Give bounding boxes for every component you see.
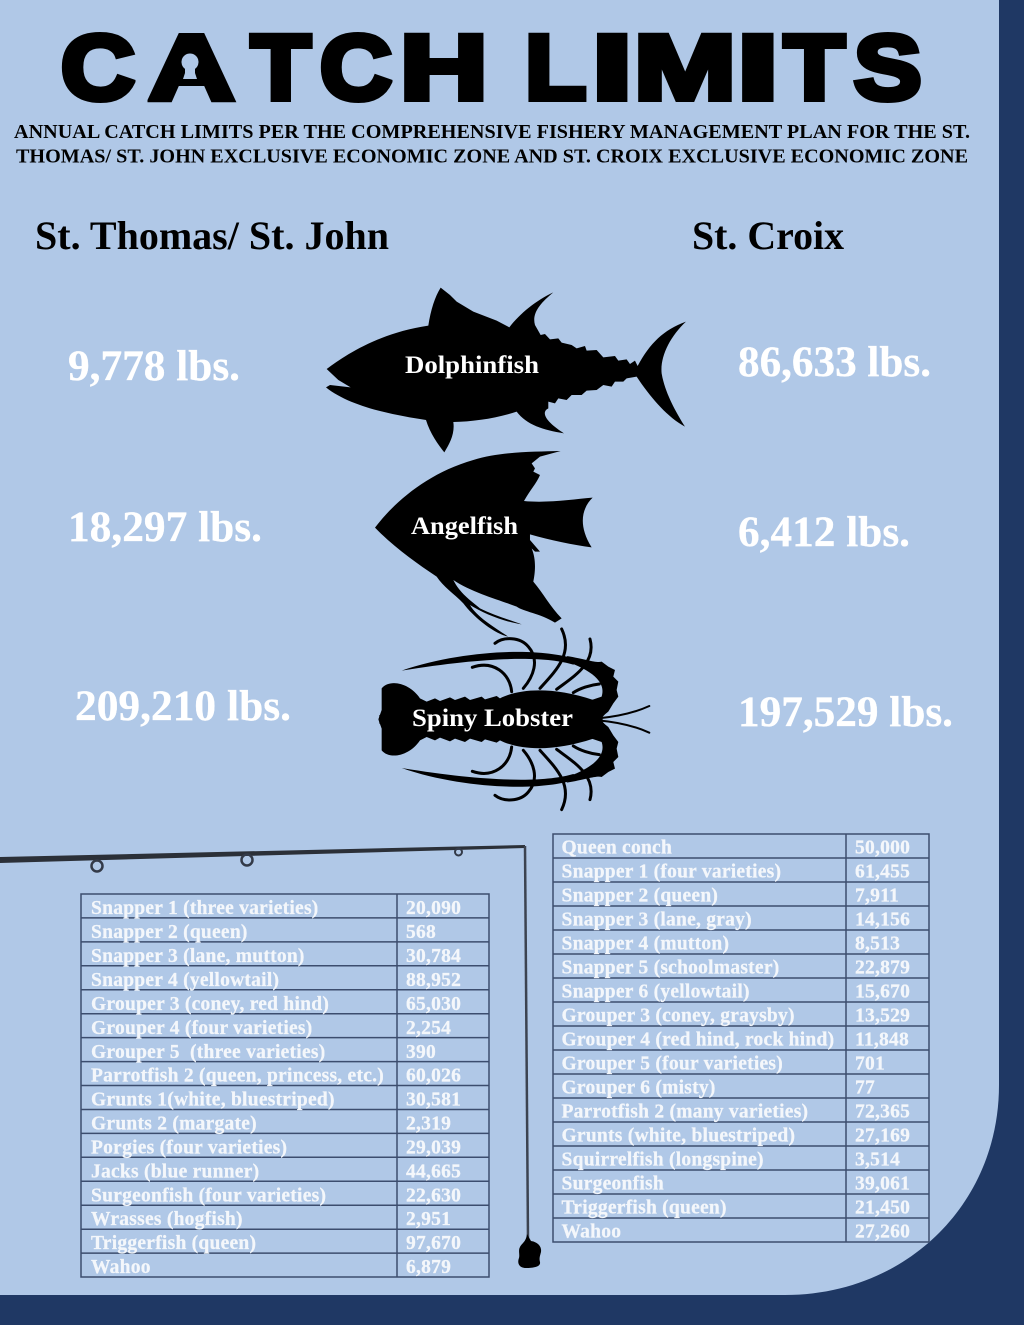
table rows: right: 11,848 [855,1030,909,1050]
value: St. Croix angelfish: 6,412 lbs. [738,509,910,556]
table rows: left: Grunts 2 (margate) [91,1114,257,1134]
table rows: right: 77 [855,1078,875,1098]
icon: spiny lobster silhouette [378,629,649,810]
table rows: right: Grunts (white, bluestriped) [562,1126,795,1146]
subtitle: THOMAS/ ST. JOHN EXCLUSIVE ECONOMIC ZONE AND ST. CROIX EXCLUSIVE ECONOMIC ZONE [16,146,968,168]
table rows: right: 61,455 [855,862,910,882]
table rows: left: 2,319 [406,1114,451,1134]
table rows: left: Grunts 1(white, bluestriped) [91,1090,335,1110]
table rows: right: Snapper 5 (schoolmaster) [562,958,779,978]
table rows: right: 7,911 [855,886,899,906]
table rows: right: 21,450 [855,1198,910,1218]
heading: St. Thomas/ St. John: St. Thomas/ St. John [35,213,389,258]
table rows: left: 29,039 [406,1138,461,1158]
table rows: left: Grouper 5 (three varieties) [91,1042,325,1063]
table rows: left: 6,879 [406,1257,451,1278]
value: St. Thomas spiny lobster: 209,210 lbs. [75,683,291,730]
heading: St. Croix: St. Croix [692,213,844,258]
table rows: left: 30,784 [406,946,461,967]
title [61,17,922,119]
title: L [524,17,586,119]
table rows: right: 27,260 [855,1222,910,1242]
title: T [784,17,845,119]
table rows: left: Wahoo [91,1257,151,1278]
table rows: left: Snapper 2 (queen) [91,922,248,943]
title: M [634,17,736,119]
table rows: right: 72,365 [855,1102,910,1122]
table rows: right: 27,169 [855,1126,910,1146]
table rows: left: Snapper 1 (three varieties) [91,898,319,919]
title: I [737,17,778,119]
table rows: right: Snapper 3 (lane, gray) [562,910,752,930]
table rows: right: Grouper 4 (red hind, rock hind) [562,1030,834,1050]
icon: fishing rod [0,845,541,1268]
value: St. Croix spiny lobster: 197,529 lbs. [738,689,953,736]
table rows: right: 39,061 [855,1174,910,1194]
table rows: right: Queen conch [562,838,672,858]
table rows: right: Squirrelfish (longspine) [562,1150,764,1170]
table rows: left: 2,254 [406,1018,451,1039]
title: C [320,17,391,119]
table rows: left: Jacks (blue runner) [91,1162,259,1182]
title: A [149,17,234,119]
table rows: right: Snapper 6 (yellowtail) [562,982,750,1002]
table rows: right: Parrotfish 2 (many varieties) [562,1102,808,1122]
table rows: right: Snapper 1 (four varieties) [562,862,781,882]
table rows: left: 97,670 [406,1233,461,1254]
title: S [854,17,922,119]
table rows: left: Grouper 4 (four varieties) [91,1018,313,1039]
icon: sinker [518,1234,541,1268]
table rows: left: Porgies (four varieties) [91,1138,287,1158]
title: I [592,17,632,119]
table rows: right: Snapper 2 (queen) [562,886,718,906]
table rows: right: Grouper 5 (four varieties) [562,1054,783,1074]
subtitle: ANNUAL CATCH LIMITS PER THE COMPREHENSIVE FISHERY MANAGEMENT PLAN FOR THE ST. [14,122,970,143]
table rows: right: 14,156 [855,910,910,930]
label: Spiny Lobster: Spiny Lobster [412,705,573,732]
table rows: left: 390 [406,1042,436,1063]
value: St. Thomas dolphinfish: 9,778 lbs. [68,343,240,390]
icon: angelfish silhouette [375,451,593,637]
label: Angelfish: Angelfish [411,513,518,540]
table rows: right: Grouper 6 (misty) [562,1078,716,1098]
table: St. Thomas/ St. John species limits [81,894,489,1278]
table rows: left: 20,090 [406,898,461,919]
table rows: left: 65,030 [406,994,461,1015]
table rows: right: 15,670 [855,982,910,1002]
table rows: right: Grouper 3 (coney, graysby) [562,1006,795,1026]
value: St. Croix dolphinfish: 86,633 lbs. [738,339,931,386]
table rows: right: Triggerfish (queen) [562,1198,727,1218]
table rows: right: 13,529 [855,1006,910,1026]
table rows: right: 701 [855,1054,885,1074]
table rows: left: 44,665 [406,1162,461,1182]
table rows: left: 2,951 [406,1209,451,1230]
table rows: left: Wrasses (hogfish) [91,1209,243,1230]
table rows: left: Triggerfish (queen) [91,1233,256,1254]
table rows: right [562,838,910,1242]
table: St. Croix species limits [553,834,929,1242]
table rows: left: 568 [406,922,436,943]
table rows: left [91,898,461,1278]
title: H [400,17,488,119]
table rows: left: Parrotfish 2 (queen, princess, etc.) [91,1066,384,1086]
value: St. Thomas angelfish: 18,297 lbs. [68,504,262,551]
table rows: right: 50,000 [855,838,910,858]
table rows: right: 22,879 [855,958,910,978]
subtitle [14,122,970,168]
table rows: left: 22,630 [406,1186,461,1206]
table rows: right: Snapper 4 (mutton) [562,934,729,954]
table rows: left: Snapper 3 (lane, mutton) [91,946,305,967]
table rows: right: 8,513 [855,934,900,954]
table rows: left: Surgeonfish (four varieties) [91,1186,326,1206]
table rows: right: Wahoo [562,1222,621,1242]
table rows: left: Snapper 4 (yellowtail) [91,970,279,991]
label: Dolphinfish: Dolphinfish [405,352,539,379]
title: C [61,17,134,119]
title: T [251,17,311,119]
table rows: left: 60,026 [406,1066,461,1086]
table rows: right: Surgeonfish [562,1174,664,1194]
table rows: left: 30,581 [406,1090,461,1110]
icon: dolphinfish silhouette [326,288,686,452]
table rows: left: 88,952 [406,970,461,991]
table rows: right: 3,514 [855,1150,900,1170]
table rows: left: Grouper 3 (coney, red hind) [91,994,329,1015]
